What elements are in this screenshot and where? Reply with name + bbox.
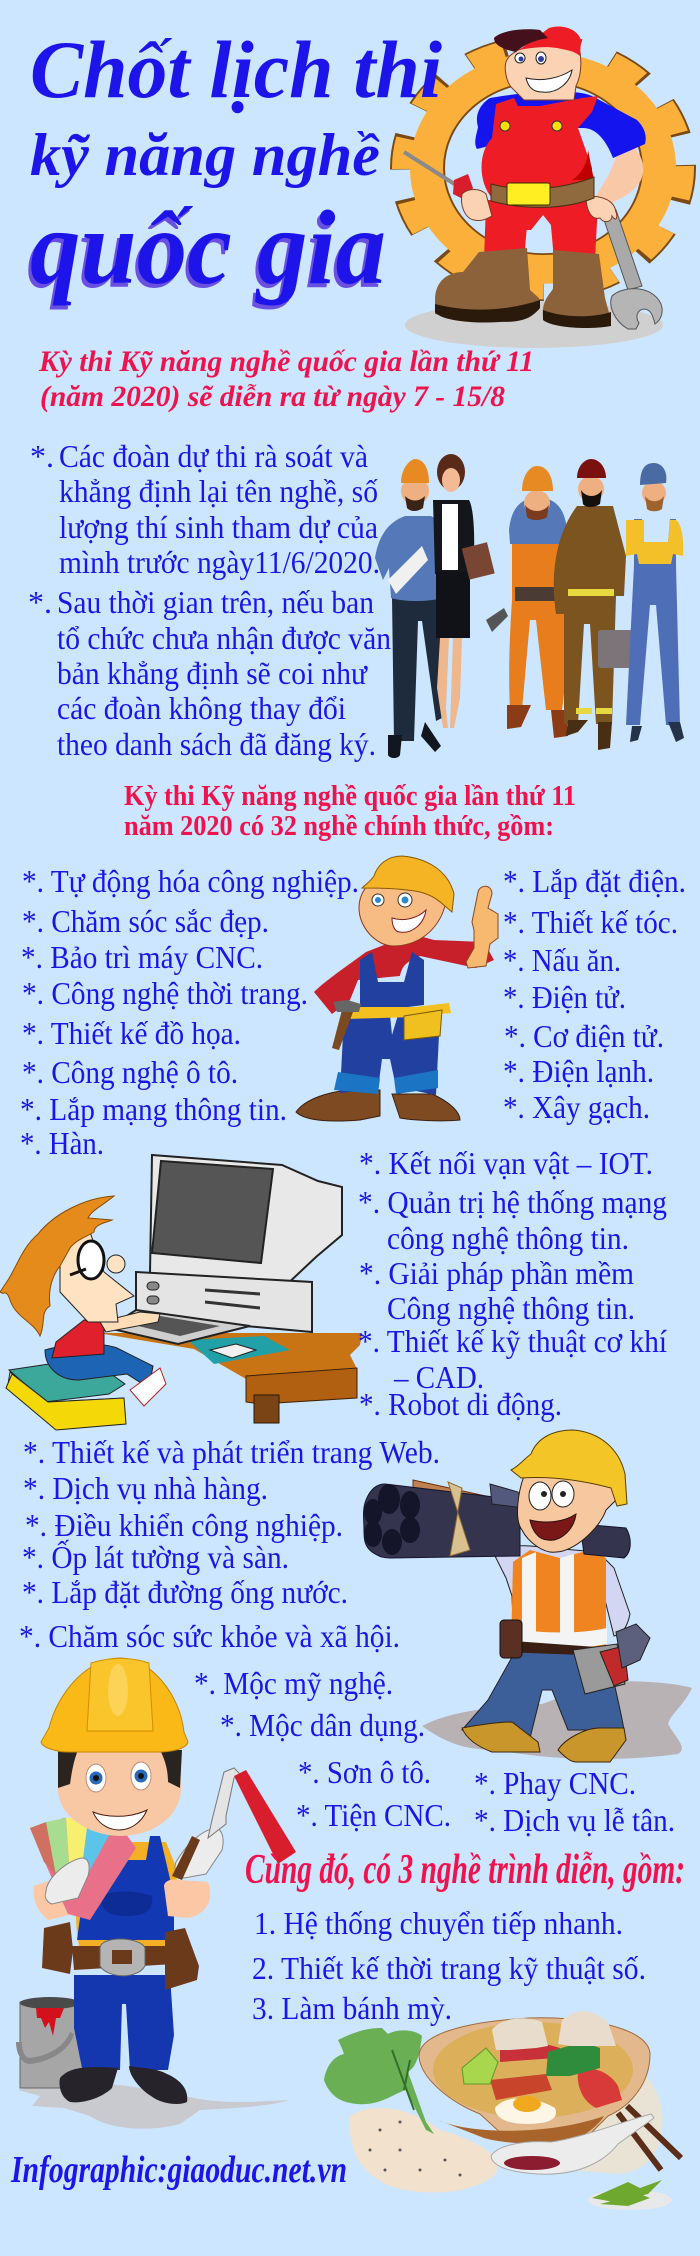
list: trades left column: *. Chăm sóc sắc đẹp. — [22, 903, 269, 939]
list: IT trades: công nghệ thông tin. — [387, 1220, 629, 1256]
list: IT trades — [358, 1145, 667, 1422]
title: Chốt lịch thi — [30, 24, 442, 115]
list: demonstration trades: 3. Làm bánh mỳ. — [252, 1990, 452, 2026]
subtitle: (năm 2020) sẽ diễn ra từ ngày 7 - 15/8 — [40, 380, 505, 413]
text block: notes for delegations: tổ chức chưa nhận được văn — [57, 620, 391, 656]
list: trades right column: *. Xây gạch. — [503, 1089, 650, 1125]
text block: notes for delegations: *. — [30, 438, 54, 474]
title — [27, 24, 442, 310]
heading: 32 official trades — [124, 781, 576, 842]
list: demonstration trades: 1. Hệ thống chuyển tiếp nhanh. — [254, 1905, 623, 1941]
list: services and construction trades: *. Ốp lát tường và sàn. — [22, 1539, 289, 1575]
subtitle: Kỳ thi Kỹ năng nghề quốc gia lần thứ 11 — [38, 345, 534, 378]
title: kỹ năng nghề — [30, 122, 380, 188]
list: services and construction trades: *. Mộc dân dụng. — [220, 1707, 425, 1743]
list: IT trades: *. Robot di động. — [359, 1386, 562, 1422]
text block: notes for delegations: khẳng định lại tên nghề, số — [59, 473, 378, 509]
list: trades left column — [20, 863, 359, 1161]
title: quốc gia — [30, 189, 386, 306]
list: trades left column: *. Lắp mạng thông tin. — [20, 1091, 287, 1127]
list: trades right column: *. Cơ điện tử. — [504, 1018, 664, 1054]
list: demonstration trades — [252, 1905, 646, 2026]
text block: notes for delegations: các đoàn không thay đổi — [57, 690, 346, 726]
list: IT trades: *. Quản trị hệ thống mạng — [358, 1184, 667, 1220]
list: trades right column: *. Thiết kế tóc. — [503, 904, 678, 940]
list: trades left column: *. Thiết kế đồ họa. — [22, 1015, 241, 1051]
list: trades right column: *. Lắp đặt điện. — [503, 863, 686, 899]
list: IT trades: *. Thiết kế kỹ thuật cơ khí — [358, 1323, 667, 1359]
text block: notes for delegations: Sau thời gian trên, nếu ban — [57, 584, 374, 620]
heading: 32 official trades: năm 2020 có 32 nghề chính thức, gồm: — [124, 811, 554, 842]
subtitle — [38, 345, 534, 413]
text block: notes for delegations: bản khẳng định sẽ coi như — [57, 655, 369, 691]
title: quốc gia — [27, 193, 383, 310]
text block: notes for delegations: theo danh sách đã đăng ký. — [57, 726, 376, 762]
list: services and construction trades: *. Tiện CNC. — [296, 1797, 451, 1833]
list: IT trades: *. Kết nối vạn vật – IOT. — [359, 1145, 653, 1181]
illustration: group of five workers — [375, 454, 684, 758]
illustration: worker carrying pipes — [364, 1430, 692, 1762]
list: trades right column: *. Điện tử. — [503, 979, 626, 1015]
list: demonstration trades: 2. Thiết kế thời trang kỹ thuật số. — [252, 1950, 646, 1986]
list: trades right column: *. Nấu ăn. — [503, 942, 621, 978]
list: trades left column: *. Tự động hóa công nghiệp. — [22, 863, 359, 899]
list: services and construction trades: *. Phay CNC. — [474, 1765, 636, 1801]
list: services and construction trades: *. Mộc mỹ nghệ. — [194, 1665, 393, 1701]
illustration: painter boy — [16, 1658, 296, 2129]
list: services and construction trades — [19, 1434, 675, 1838]
illustration: boy at computer — [0, 1155, 362, 1430]
list: services and construction trades: *. Dịch vụ lễ tân. — [474, 1802, 675, 1838]
list: services and construction trades: *. Chăm sóc sức khỏe và xã hội. — [19, 1618, 400, 1654]
list: services and construction trades: *. Lắp đặt đường ống nước. — [22, 1574, 348, 1610]
text block: notes for delegations — [28, 438, 391, 762]
text block: notes for delegations: *. — [28, 584, 52, 620]
illustration: mechanic with gear — [404, 26, 679, 348]
text block: notes for delegations: mình trước ngày11/6/2020. — [59, 544, 380, 580]
list: services and construction trades: *. Sơn ô tô. — [298, 1754, 431, 1790]
list: trades left column: *. Bảo trì máy CNC. — [21, 939, 263, 975]
list: IT trades: Công nghệ thông tin. — [387, 1290, 635, 1326]
list: trades left column: *. Hàn. — [20, 1125, 104, 1161]
illustration: noodle bowl with sides — [324, 2011, 681, 2210]
text block: notes for delegations: lượng thí sinh tham dự của — [59, 509, 378, 545]
text block: notes for delegations: Các đoàn dự thi rà soát và — [59, 438, 368, 474]
heading: 32 official trades: Kỳ thi Kỹ năng nghề quốc gia lần thứ 11 — [124, 781, 576, 812]
list: trades left column: *. Công nghệ thời trang. — [22, 975, 308, 1011]
list: IT trades: – CAD. — [393, 1359, 484, 1395]
source credit: Infographic:giaoduc.net.vn — [10, 2149, 347, 2191]
list: trades left column: *. Công nghệ ô tô. — [22, 1054, 238, 1090]
illustration: thumbs-up worker — [296, 856, 498, 1121]
list: services and construction trades: *. Dịch vụ nhà hàng. — [23, 1470, 268, 1506]
list: trades right column — [503, 863, 686, 1125]
list: services and construction trades: *. Điều khiển công nghiệp. — [25, 1507, 343, 1543]
list: IT trades: *. Giải pháp phần mềm — [359, 1255, 634, 1291]
list: services and construction trades: *. Thiết kế và phát triển trang Web. — [23, 1434, 440, 1470]
list: trades right column: *. Điện lạnh. — [503, 1053, 654, 1089]
